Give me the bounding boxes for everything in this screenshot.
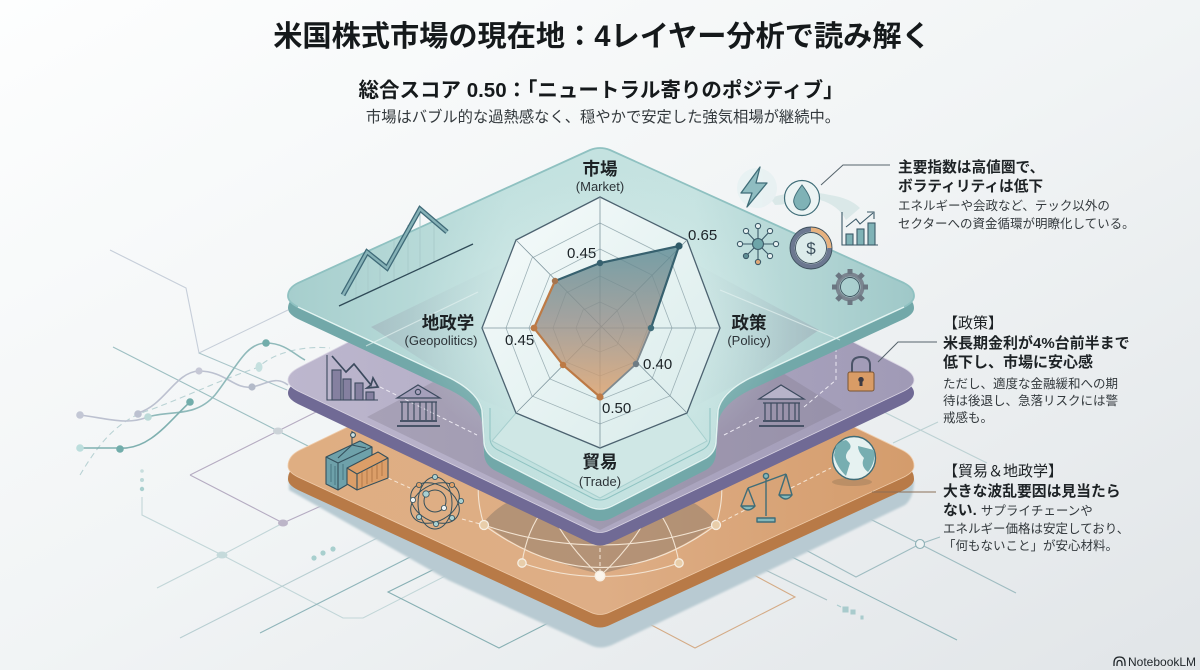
summary line: 市場はバブル的な過熱感なく、穏やかで安定した強気相場が継続中。 bbox=[366, 108, 840, 126]
value labels: 0.45 bbox=[505, 332, 534, 349]
subtitle: 総合スコア 0.50：「ニュートラル寄りのポジティブ」 bbox=[358, 78, 844, 102]
icon: padlock bbox=[848, 357, 874, 391]
icon: dollar ring: $ bbox=[806, 239, 816, 258]
callout: policy: 【政策】 bbox=[943, 315, 1003, 332]
axis label: policy bbox=[727, 313, 771, 348]
callout: policy: 待は後退し、急落リスクには警 bbox=[943, 393, 1119, 408]
callout: trade and geopolitics: 【貿易＆地政学】 bbox=[943, 463, 1063, 480]
icon: globe bbox=[832, 436, 876, 486]
layer: market (teal glass plate) bbox=[288, 148, 914, 521]
data polygon bbox=[531, 242, 683, 401]
plate edge highlights bbox=[298, 307, 904, 509]
icon: bank left bbox=[397, 385, 440, 426]
plate side bbox=[288, 323, 914, 628]
plate surface bbox=[288, 148, 914, 509]
axis label: geopolitics: (Geopolitics) bbox=[405, 333, 477, 348]
axis label: geopolitics bbox=[405, 313, 477, 348]
icon: water drop bbox=[784, 180, 820, 216]
icon: shipping containers bbox=[326, 431, 388, 490]
icon: lightning bolt bbox=[741, 167, 767, 207]
plate surface bbox=[288, 310, 914, 614]
axis label: policy: 政策 bbox=[732, 313, 767, 333]
icon: rising line chart bbox=[339, 207, 473, 306]
axis label: trade bbox=[579, 452, 621, 489]
value labels: 0.65 bbox=[688, 227, 717, 244]
surface highlights bbox=[366, 290, 840, 346]
icon: gear bbox=[832, 269, 868, 305]
title: 米国株式市場の現在地：4レイヤー分析で読み解く bbox=[273, 20, 931, 53]
lower shelf bbox=[492, 413, 707, 498]
value labels: 0.45 bbox=[567, 245, 596, 262]
icon: pale background arrows bbox=[737, 168, 860, 220]
shadow of upper plates bbox=[484, 490, 716, 574]
layer: policy (purple plate) bbox=[288, 218, 914, 546]
axis label: market bbox=[576, 159, 624, 194]
callout: policy: 米長期金利が4%台前半まで bbox=[943, 334, 1130, 352]
value labels bbox=[505, 227, 717, 417]
plate shadow bbox=[289, 475, 914, 648]
flow curves with nodes bbox=[76, 339, 330, 475]
radar chart bbox=[405, 159, 771, 489]
background circuit lines bbox=[110, 250, 1016, 648]
callout: trade and geopolitics: エネルギー価格は安定しており、 bbox=[943, 521, 1129, 536]
callout: market: エネルギーや会政など、テック以外の bbox=[898, 199, 1110, 213]
axis label: market: (Market) bbox=[576, 179, 624, 194]
callout: trade and geopolitics: 大きな波乱要因は見当たら bbox=[943, 482, 1121, 500]
value labels: 0.50 bbox=[602, 400, 631, 417]
plate side bbox=[288, 162, 914, 521]
callout: trade and geopolitics: ない. サプライチェーンや bbox=[943, 502, 1093, 519]
axis label: trade: (Trade) bbox=[579, 474, 621, 489]
dashed connectors bbox=[380, 345, 836, 435]
callout: trade and geopolitics: 「何もないこと」が安心材料。 bbox=[943, 538, 1118, 553]
callout: policy: 低下し、市場に安心感 bbox=[943, 353, 1093, 371]
axis label: geopolitics: 地政学 bbox=[422, 313, 474, 333]
layer: trade (orange plate) bbox=[288, 310, 914, 648]
plate side bbox=[288, 231, 914, 546]
callout: market: セクターへの資金循環が明瞭化している。 bbox=[898, 216, 1135, 231]
plate surface bbox=[288, 218, 914, 532]
icon: bank right bbox=[759, 385, 804, 426]
shadow of teal plate bbox=[367, 365, 842, 530]
radar grid bbox=[482, 197, 720, 448]
icon: balance scale bbox=[741, 473, 792, 522]
icon: rising bar chart bbox=[842, 212, 878, 245]
dashed connectors bbox=[388, 468, 831, 576]
callout: market: ボラティリティは低下 bbox=[898, 178, 1043, 195]
logo: NotebookLM: NotebookLM bbox=[1128, 655, 1196, 669]
icon: falling bar chart bbox=[327, 355, 378, 400]
surface tints bbox=[371, 250, 530, 420]
icon: network sphere bbox=[403, 474, 467, 532]
callout: policy: 戒感も。 bbox=[943, 410, 993, 425]
axis label: trade: 貿易 bbox=[582, 452, 618, 472]
icon: dollar ring bbox=[790, 227, 832, 269]
icon: hub network bbox=[737, 223, 779, 265]
axis label: market: 市場 bbox=[582, 159, 618, 179]
axis label: policy: (Policy) bbox=[727, 333, 771, 348]
callout: trade and geopolitics bbox=[872, 463, 1129, 553]
callout: policy: ただし、適度な金融緩和への期 bbox=[943, 376, 1118, 391]
callout: market: 主要指数は高値圏で、 bbox=[898, 158, 1044, 176]
value labels: 0.40 bbox=[643, 356, 672, 373]
callout: market bbox=[821, 158, 1135, 231]
callout: policy bbox=[878, 315, 1130, 425]
dome network bbox=[478, 450, 722, 581]
